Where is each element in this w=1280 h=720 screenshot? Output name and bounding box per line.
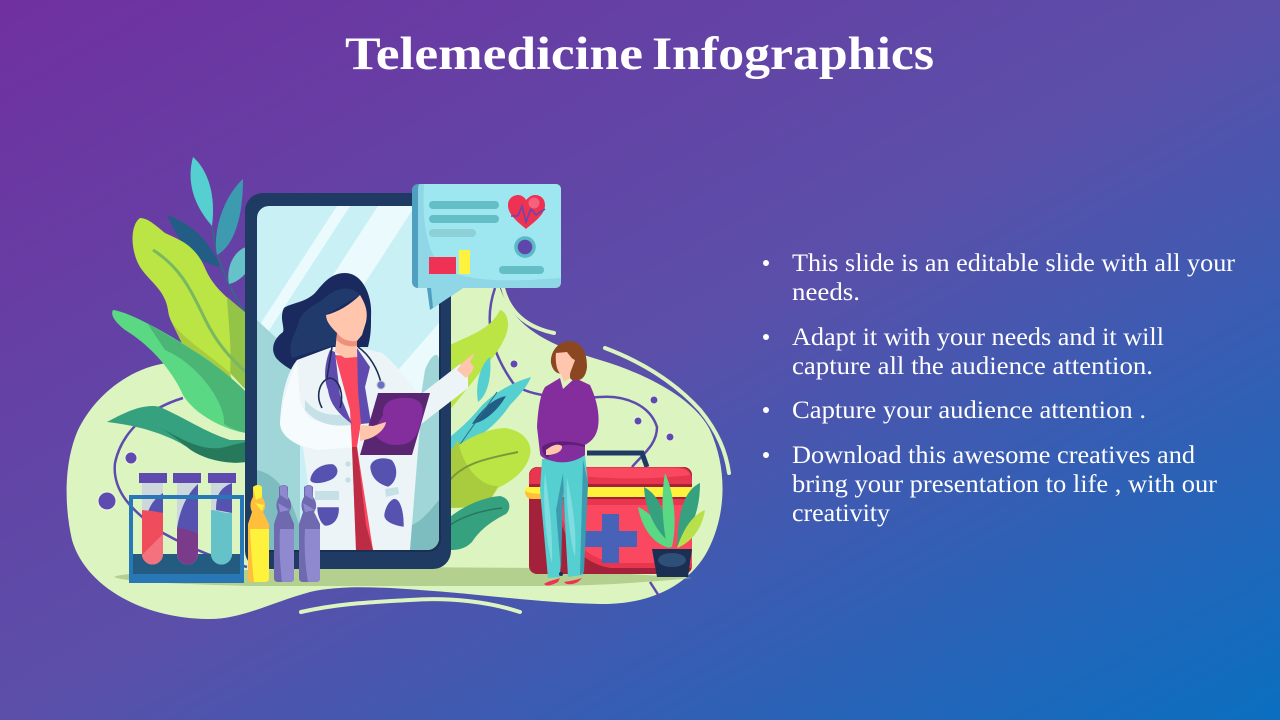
bullet list xyxy=(763,250,1236,527)
chat bubble with health data xyxy=(412,184,561,310)
coat pockets and patches xyxy=(310,458,404,527)
bullet item 2: capture all the audience attention. xyxy=(792,353,1153,380)
hair xyxy=(273,273,371,370)
left foliage xyxy=(107,157,246,463)
title: Telemedicine xyxy=(345,28,643,80)
tablet clipboard xyxy=(360,393,430,455)
face and neck xyxy=(326,295,367,358)
yellow ampoule xyxy=(248,485,269,582)
title xyxy=(345,28,934,80)
teal leaf xyxy=(450,377,531,450)
coat xyxy=(280,347,468,550)
potted plant xyxy=(638,473,705,577)
smartphone xyxy=(245,193,451,569)
woman patient xyxy=(537,341,599,585)
large lime leaf xyxy=(450,428,530,508)
tube 3 xyxy=(208,473,236,564)
hand xyxy=(360,422,386,441)
data lines xyxy=(429,201,544,274)
pot xyxy=(652,549,692,577)
face xyxy=(556,352,575,382)
first aid case xyxy=(525,453,692,574)
bullet item 4: bring your presentation to life , with our xyxy=(792,471,1218,498)
mini bars xyxy=(429,250,470,274)
bullet item 2: Adapt it with your needs and it will xyxy=(792,324,1164,351)
test tube rack xyxy=(129,473,244,583)
bright green leaf xyxy=(112,310,246,433)
lapels xyxy=(325,350,352,424)
branch with small leaves xyxy=(167,157,246,312)
shoes xyxy=(544,578,560,585)
bullet item 4: Download this awesome creatives and xyxy=(792,442,1196,469)
bullet item 1: This slide is an editable slide with all your xyxy=(792,250,1236,277)
bullet item 2 xyxy=(763,324,1164,380)
big lime leaf xyxy=(132,218,246,390)
ampoules xyxy=(248,485,320,582)
cross xyxy=(585,514,637,563)
dark green leaf xyxy=(450,496,509,550)
purple ampoule xyxy=(274,485,294,582)
yellow band xyxy=(525,487,692,499)
bullet item 4 xyxy=(763,442,1218,527)
trousers xyxy=(540,455,588,578)
shirt xyxy=(335,355,373,550)
doctor xyxy=(273,273,475,550)
light accent curves xyxy=(301,288,729,612)
sweater xyxy=(537,378,599,462)
right foliage xyxy=(450,310,531,550)
bullet item 4: creativity xyxy=(792,500,891,527)
purple ampoule 2 xyxy=(299,485,320,582)
illustration: telemedicine scene xyxy=(67,157,729,619)
dark green leaf xyxy=(107,406,246,463)
purple dots xyxy=(98,360,674,510)
rack frame xyxy=(129,495,244,583)
pointing hand xyxy=(457,353,475,378)
lime leaf upper xyxy=(450,310,508,410)
tube 2 xyxy=(173,473,201,564)
thin purple curves xyxy=(115,288,659,596)
bullet item 3: Capture your audience attention . xyxy=(792,397,1146,424)
icon: heart with pulse xyxy=(508,195,545,229)
title: Infographics xyxy=(652,28,934,80)
hand xyxy=(546,445,562,455)
status circle xyxy=(516,238,534,256)
tube 1 xyxy=(139,473,167,564)
hair xyxy=(551,341,587,380)
bullet item 1 xyxy=(763,250,1236,306)
screen background xyxy=(257,206,439,550)
ground shadow xyxy=(114,567,692,586)
stethoscope xyxy=(319,347,381,408)
bullet item 1: needs. xyxy=(792,279,860,306)
background blob xyxy=(67,270,723,619)
